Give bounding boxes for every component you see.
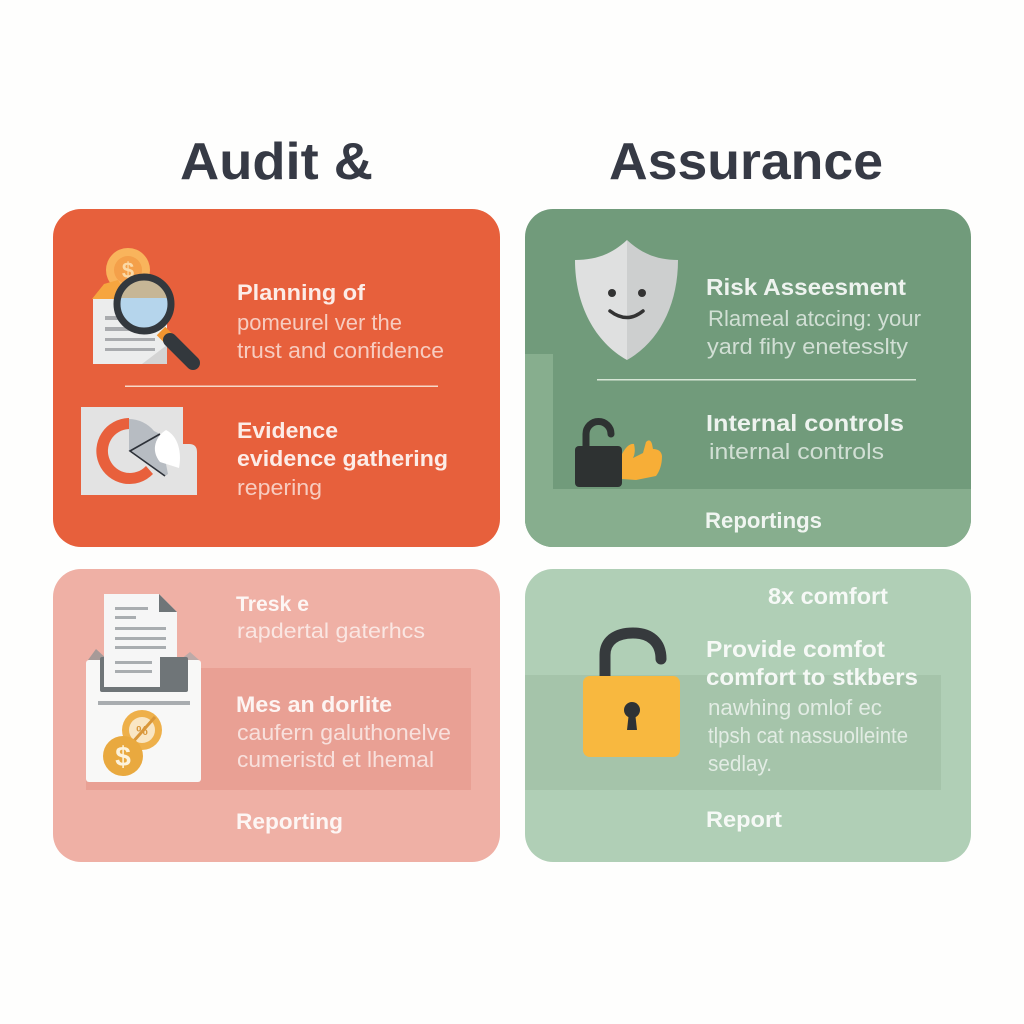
icon: shield with smile xyxy=(575,240,678,360)
text: evidence gathering: evidence gathering xyxy=(237,446,448,471)
text: report: Report xyxy=(706,807,783,832)
text: planning line 1: pomeurel ver the xyxy=(237,310,402,335)
text: risk line 2: yard fihy enetesslty xyxy=(707,334,908,359)
text: comfort label: 8x comfort xyxy=(768,583,888,609)
text: evidence heading: Evidence xyxy=(237,418,338,443)
title: Audit &: Audit & xyxy=(180,133,373,191)
text: second line 2: cumeristd et lhemal xyxy=(237,747,434,772)
text: provide comfort heading: Provide comfot xyxy=(706,636,885,662)
text: internal controls heading: Internal controls xyxy=(706,410,904,436)
text: comfort line 1: nawhing omlof ec xyxy=(708,695,882,720)
text: internal controls line: internal controls xyxy=(709,439,884,464)
text: second line 1: caufern galuthonelve xyxy=(237,720,451,745)
icon: magnifier over document: $ xyxy=(122,258,134,283)
panel: comfort and report xyxy=(525,569,971,862)
text: risk line 1: Rlameal atccing: your xyxy=(708,306,921,331)
panel: planning and evidence xyxy=(53,209,500,547)
icon: pie chart report xyxy=(81,407,197,495)
text: second heading: Mes an dorlite xyxy=(236,692,392,717)
icon: yellow padlock xyxy=(583,633,680,757)
text: comfort line 3: sedlay. xyxy=(708,751,772,776)
panel: risk and internal controls xyxy=(525,209,971,547)
text: evidence line 3: repering xyxy=(237,475,322,500)
icon: document tray with coins: $ xyxy=(115,741,131,772)
icon: document tray with coins: % xyxy=(136,723,148,738)
text: task line: rapdertal gaterhcs xyxy=(237,620,425,643)
icon: padlock and hand xyxy=(575,421,662,487)
title: Assurance: Assurance xyxy=(609,133,883,191)
text: task heading: Tresk e xyxy=(236,593,309,616)
text: comfort line 2: tlpsh cat nassuolleinte xyxy=(708,723,908,748)
text: reporting: Reporting xyxy=(236,809,343,834)
text: comfort to stakeholders: comfort to stkbers xyxy=(706,664,918,690)
text: reportings: Reportings xyxy=(705,508,822,533)
text: planning line 2: trust and confidence xyxy=(237,338,444,363)
icon: magnifier over document xyxy=(92,248,193,364)
text: planning heading: Planning of xyxy=(237,280,366,305)
text: risk heading: Risk Asseesment xyxy=(706,274,906,300)
panel: task and reporting xyxy=(53,569,500,862)
icon: document tray with coins xyxy=(86,594,201,782)
